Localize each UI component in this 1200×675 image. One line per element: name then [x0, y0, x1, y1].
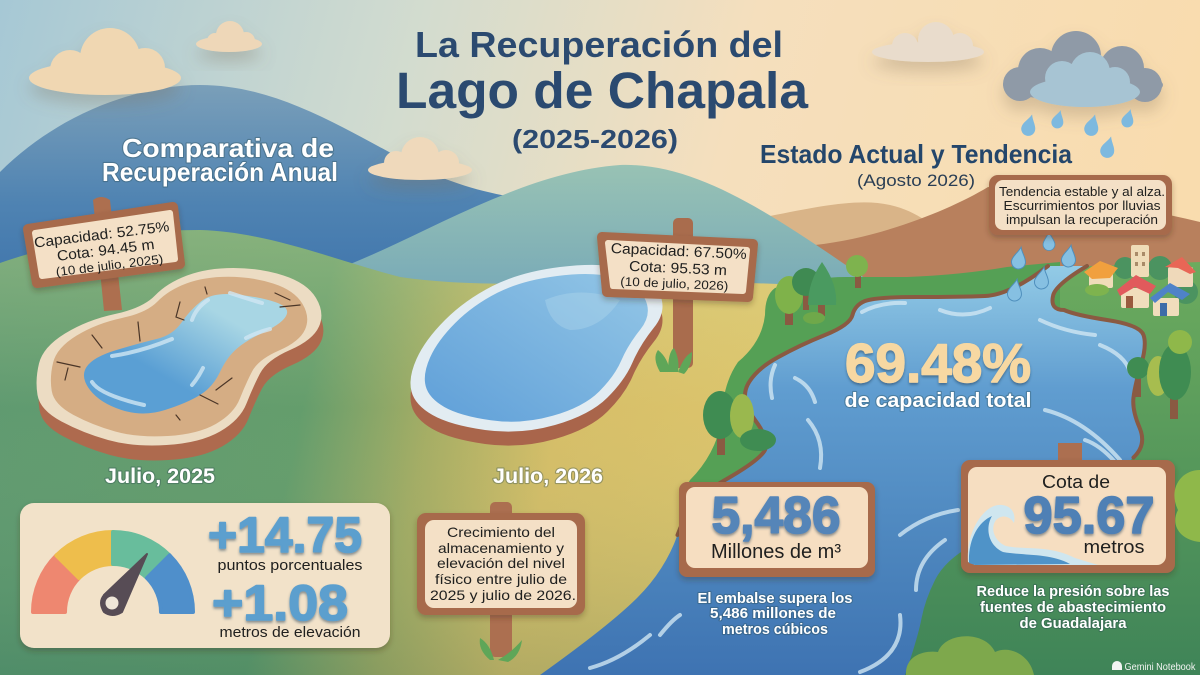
- river: [540, 266, 1145, 675]
- brown hill: [815, 187, 1200, 300]
- cloud: top right: [872, 22, 984, 62]
- caption: volume: [698, 591, 852, 638]
- stat: 69.48% capacity: de capacidad total: [844, 390, 1032, 412]
- icon: wave: [968, 505, 1098, 565]
- title: [396, 24, 809, 154]
- sign: growth note: [417, 502, 585, 662]
- sign: growth note: físico entre julio de: [435, 571, 567, 587]
- bush: bottom: [906, 636, 1034, 675]
- bush: right edge: [1174, 470, 1200, 542]
- sign: 2025: Capacidad: 52.75%: [33, 219, 170, 252]
- heading: comparativa: Comparativa de: [122, 133, 334, 163]
- village houses: [1084, 245, 1198, 316]
- sign: elevation: [961, 443, 1175, 573]
- stat: 69.48% capacity: 69.48%: [845, 332, 1031, 394]
- rain cloud: [1003, 31, 1163, 107]
- blue mountain: [0, 85, 530, 320]
- title: La Recuperación del: [415, 24, 783, 65]
- caption: elevation: de Guadalajara: [1020, 616, 1127, 632]
- left river bank: [681, 262, 1060, 540]
- sign: tendencia: Tendencia estable y al alza.: [999, 184, 1165, 199]
- title: Lago de Chapala: [396, 62, 809, 119]
- caption: elevation: [976, 584, 1170, 632]
- sign: volume: Millones de m³: [711, 541, 841, 563]
- caption: elevation: fuentes de abastecimiento: [980, 600, 1166, 616]
- stat: +1.08: metros de elevación: [220, 624, 360, 641]
- stat: +14.75: puntos porcentuales: [218, 557, 362, 574]
- sign: tendencia: impulsan la recuperación: [1006, 212, 1158, 227]
- sign: tendencia: [989, 175, 1172, 235]
- sign: 2026: Capacidad: 67.50%: [610, 241, 747, 263]
- cloud: centre: [368, 137, 472, 180]
- trees: upper left bank: [775, 255, 868, 325]
- sign: growth note: almacenamiento y: [438, 540, 564, 556]
- heading: estado actual: [760, 139, 1073, 190]
- sign: growth note: 2025 y julio de 2026.: [430, 587, 576, 603]
- heading: comparativa: [102, 133, 338, 187]
- sign: 2025: (10 de julio, 2025): [55, 252, 164, 279]
- right land: [860, 262, 1200, 675]
- sign: tendencia: Escurrimientos por lluvias: [1004, 198, 1161, 213]
- heading: estado actual: Estado Actual y Tendencia: [760, 139, 1073, 169]
- sign: elevation: metros: [1084, 537, 1144, 557]
- heading: estado actual: (Agosto 2026): [857, 171, 975, 190]
- stat: +14.75: +14.75: [208, 507, 362, 563]
- tan hill: [770, 202, 955, 290]
- sign: 2026: (10 de julio, 2026): [620, 275, 729, 293]
- caption: elevation: Reduce la presión sobre las: [976, 584, 1170, 600]
- sign: growth note: elevación del nivel: [437, 555, 565, 571]
- label: julio 2025: Julio, 2025: [105, 465, 215, 488]
- caption: volume: metros cúbicos: [722, 622, 828, 638]
- title: (2025-2026): [512, 124, 678, 154]
- label: julio 2026: Julio, 2026: [493, 465, 603, 488]
- gauge chart: [33, 532, 193, 615]
- sign: elevation: Cota de: [1042, 472, 1110, 492]
- stat: +1.08: +1.08: [212, 575, 348, 631]
- left and centre land: [0, 230, 800, 675]
- teal mountain: [340, 165, 875, 310]
- caption: volume: 5,486 millones de: [710, 606, 836, 622]
- lake 2026: [410, 265, 663, 446]
- heading: comparativa: Recuperación Anual: [102, 157, 338, 187]
- cloud: small top: [196, 21, 262, 52]
- sign: elevation: 95.67: [1024, 487, 1154, 545]
- sign: growth note: Crecimiento del: [447, 524, 555, 540]
- caption: volume: El embalse supera los: [698, 591, 852, 607]
- sign: 2026: Cota: 95.53 m: [629, 259, 727, 279]
- sign: 2026: [602, 218, 753, 374]
- sign: 2025: Cota: 94.45 m: [56, 237, 155, 265]
- panel: gauge and increments: [20, 503, 390, 648]
- rain drops over river: [1006, 232, 1078, 302]
- sign: volume: 5,486: [712, 487, 840, 545]
- sign: volume: [679, 482, 875, 577]
- rain drops: [1020, 108, 1136, 159]
- lake 2025: [37, 268, 323, 460]
- trees: right bank: [1127, 330, 1192, 419]
- cloud: top left: [29, 28, 181, 95]
- trees: mid left bank: [703, 391, 776, 455]
- sign: 2025: [28, 197, 180, 311]
